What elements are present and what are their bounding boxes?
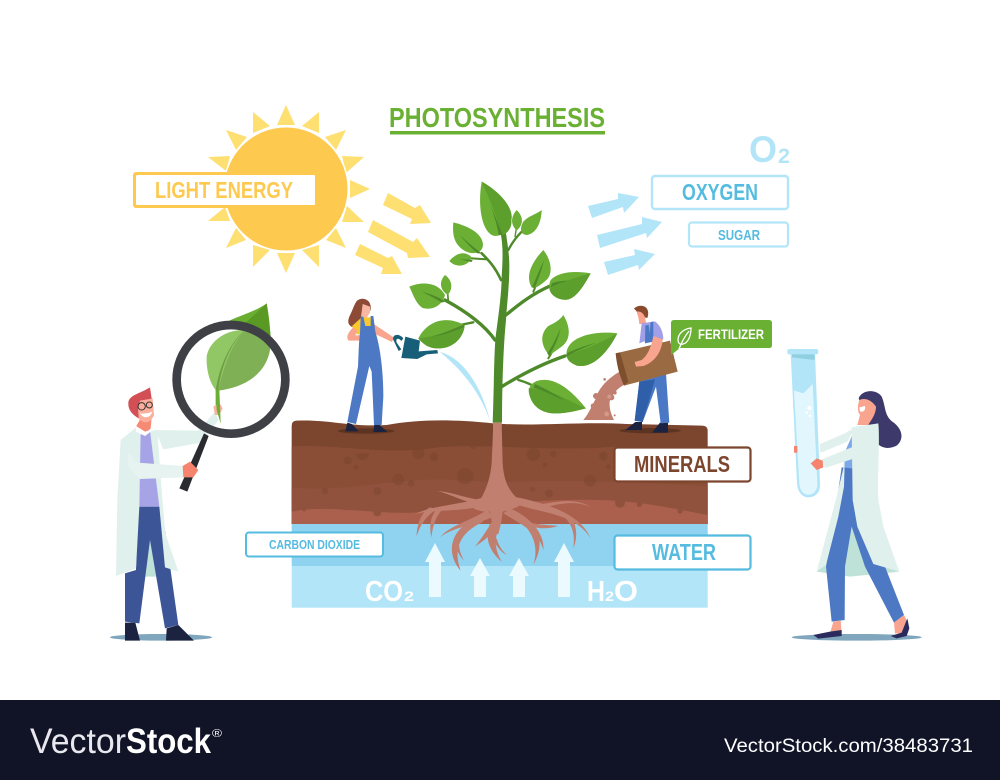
- inner top: [843, 426, 867, 468]
- trousers: [826, 467, 904, 623]
- lab coat: [116, 427, 178, 576]
- label: CO2: CO: [365, 576, 403, 608]
- magnifier ring: [177, 325, 285, 434]
- label: O2: O: [749, 129, 777, 170]
- label: fertilizer callout: FERTILIZER: [698, 326, 764, 342]
- sun rays: [208, 105, 370, 273]
- label: O2: 2: [778, 145, 790, 168]
- label: water: [614, 536, 750, 570]
- label: CO2: 2: [404, 588, 414, 604]
- character: gardener man with fertilizer bag: [583, 306, 681, 433]
- face: [361, 304, 370, 321]
- shoes: [125, 623, 194, 641]
- label: carbon dioxide: [246, 532, 383, 556]
- shoes: [345, 423, 387, 432]
- image id: VectorStock.com/38483731: [724, 736, 973, 757]
- head: [128, 387, 155, 436]
- label: light energy: [133, 172, 333, 208]
- label: H2O: H: [587, 576, 605, 608]
- coat back lining: [817, 520, 899, 577]
- leaf behind lens: [229, 303, 271, 343]
- arms: [347, 325, 394, 342]
- label: light energy: LIGHT ENERGY: [155, 177, 293, 203]
- label: fertilizer callout: [671, 320, 772, 355]
- ankles and shoes: [813, 615, 909, 639]
- logo: VectorStock: Vector: [30, 722, 126, 761]
- lab coat: [817, 423, 899, 572]
- character: scientist with magnifying glass: [110, 303, 285, 641]
- character: gardener woman with watering can: [338, 299, 438, 434]
- icon: leaf: [678, 328, 691, 349]
- shoes: [625, 422, 668, 433]
- character: scientist with test tube: [787, 349, 922, 641]
- hand on leaf stem: [213, 403, 223, 415]
- hand: [811, 458, 823, 470]
- test tube: [787, 349, 820, 497]
- forearm: [822, 433, 878, 468]
- label: sugar: [689, 222, 788, 246]
- watering can: [393, 335, 438, 359]
- trousers: [635, 373, 669, 423]
- plant leaves: [409, 182, 617, 413]
- sweater: [138, 431, 162, 507]
- shirt and overall bib: [639, 321, 663, 343]
- arrows: rising CO2 and water: [425, 543, 574, 597]
- trousers: [125, 507, 178, 628]
- ground: soil layers: [292, 420, 708, 524]
- arm raised: [155, 412, 218, 449]
- leaf midribs: [422, 203, 597, 401]
- plant stem and branches: [445, 227, 565, 430]
- logo: VectorStock: ®: [212, 728, 222, 740]
- plant roots: [415, 423, 591, 571]
- label: minerals: MINERALS: [634, 451, 730, 477]
- ground shadow: [619, 428, 681, 433]
- ground shadow: [338, 428, 394, 434]
- head: [634, 306, 648, 324]
- hair: [859, 391, 901, 448]
- yellow top: [352, 317, 376, 336]
- footer bar: [0, 700, 1000, 780]
- label: oxygen: OXYGEN: [682, 179, 758, 205]
- label: H2O: 2: [605, 588, 614, 604]
- label: oxygen: [652, 176, 788, 209]
- plant: [409, 182, 617, 430]
- coat lining: [137, 530, 168, 577]
- forearm and hand: [127, 452, 198, 479]
- label: sugar: SUGAR: [718, 228, 760, 244]
- arrows: sunlight: [355, 193, 431, 274]
- face and neck: [857, 399, 876, 425]
- arm: [635, 336, 663, 367]
- hair: [348, 299, 371, 328]
- icon: sun with light energy label: [133, 105, 370, 273]
- title: PHOTOSYNTHESIS: [389, 102, 605, 133]
- label: H2O: O: [614, 576, 638, 608]
- logo: VectorStock: Stock: [126, 722, 211, 761]
- fertilizer pile: [583, 368, 627, 420]
- logo: VectorStock: [30, 722, 222, 761]
- label: minerals: [614, 448, 750, 482]
- hand behind tube: [794, 446, 797, 453]
- label: carbon dioxide: CARBON DIOXIDE: [269, 537, 360, 552]
- arrows: oxygen and sugar output: [588, 193, 662, 275]
- leaf shaded halves: [418, 182, 617, 413]
- water stream: [440, 352, 490, 421]
- overalls: [347, 316, 383, 425]
- magnifier handle: [179, 433, 209, 492]
- ground shadow: [110, 634, 212, 641]
- label: H2O: [587, 576, 638, 608]
- lens leaf: [207, 330, 271, 423]
- ground: water layers: [292, 520, 708, 608]
- label: water: WATER: [652, 539, 716, 565]
- ground shadow: [792, 634, 922, 641]
- fertilizer bag: [616, 341, 678, 386]
